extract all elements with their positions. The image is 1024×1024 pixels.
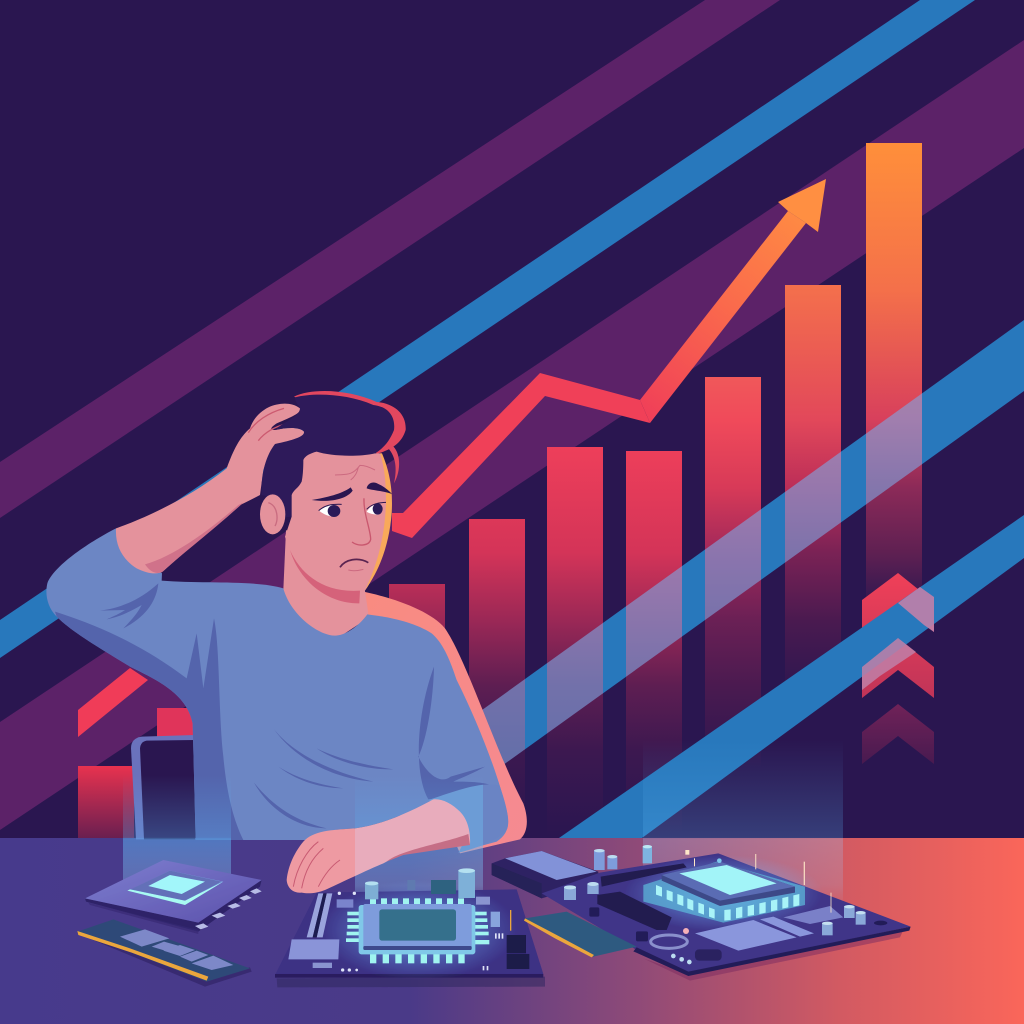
chair: [131, 735, 195, 839]
vertical glow column: left chip: [123, 775, 231, 905]
processor pins: [346, 898, 489, 963]
glow: [623, 855, 823, 932]
raised arm and hand: [116, 404, 304, 573]
vertical glow column: right board: [643, 740, 843, 910]
expansion slots: [597, 863, 687, 930]
centre motherboard: [275, 868, 545, 987]
capacitors: [365, 868, 500, 927]
shirt: [46, 528, 508, 852]
shirt shadow side: [55, 612, 243, 840]
shirt folds: [100, 583, 498, 828]
rising arrow: [78, 179, 826, 737]
board: [542, 853, 911, 973]
rising bar chart: [78, 143, 922, 838]
processor: [359, 904, 475, 954]
nose and wrinkles: [352, 498, 371, 545]
mouth: [340, 559, 368, 567]
translucent band highlights over the bars: [400, 394, 922, 816]
hair: [262, 391, 406, 517]
forearm, cuff and hand on table: [287, 784, 508, 893]
rim light behind the shoulder: [358, 591, 527, 853]
flat chips: [695, 906, 843, 951]
capacitors: [564, 845, 866, 935]
rising light sparks: [685, 850, 832, 913]
memory slots: [307, 893, 332, 937]
right motherboard: [492, 845, 911, 981]
vertical glow column: centre board: [355, 775, 483, 905]
table: [0, 838, 1024, 1024]
connector block: [507, 910, 529, 969]
ear: [260, 494, 285, 534]
lower blue band: [559, 515, 1024, 838]
left processor chip: [85, 860, 262, 934]
eyebrows: [312, 487, 353, 501]
ring and small parts: [589, 858, 887, 964]
socket glow: [318, 880, 518, 980]
chevron highlights inside the lower band: [862, 587, 934, 690]
left memory stick: [77, 919, 252, 987]
second memory stick: [524, 912, 637, 957]
processor assembly: [643, 862, 805, 923]
man: [46, 391, 527, 853]
eyes: [319, 505, 335, 517]
rear module: [492, 851, 598, 898]
neck: [283, 530, 368, 637]
chevrons: [862, 573, 934, 764]
face: [285, 452, 392, 603]
